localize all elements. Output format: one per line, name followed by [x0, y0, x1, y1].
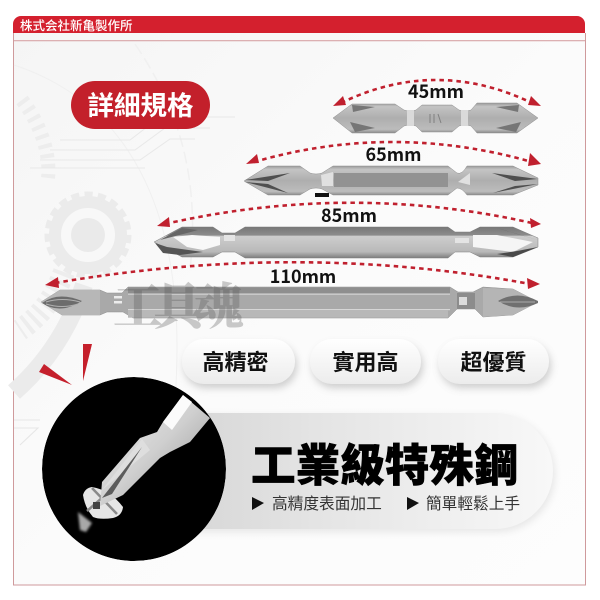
badge: specifications [71, 81, 210, 129]
header rule [14, 40, 585, 41]
measure arrow: 85mm [157, 202, 541, 228]
accent marks [39, 344, 92, 385]
badge: specifications: 詳細規格 [88, 84, 194, 123]
measure arrow: 65mm [246, 141, 541, 167]
length label: 65mm [366, 141, 421, 167]
watermark: 工具魂 [113, 267, 244, 339]
feature pill: superior quality: 超優質 [460, 345, 527, 377]
bullet: surface finish: 高精度表面加工 [272, 491, 382, 514]
banner: industrial steel [120, 413, 555, 532]
screw head [83, 487, 123, 519]
bit: 110mm [41, 287, 538, 318]
header bar [13, 15, 585, 34]
bit: 45mm [333, 103, 538, 133]
feature pill: high precision: 高精密 [202, 345, 269, 377]
label fragment behind 65mm bit [315, 193, 329, 197]
screw shank [78, 512, 92, 532]
bullet: easy to use: 簡單輕鬆上手 [426, 491, 520, 514]
length label: 110mm [270, 263, 336, 289]
feature pill: practical: 實用高 [332, 345, 399, 377]
bit: 65mm [244, 166, 538, 195]
feature pill: high precision [182, 339, 297, 388]
length label: 45mm [408, 78, 464, 104]
background gear and circuit pattern [14, 44, 235, 445]
bit: 85mm [154, 227, 538, 258]
feature pill: superior quality [438, 339, 551, 388]
photo: bit tip in screw head [42, 377, 226, 561]
company name: 株式会社新亀製作所 [20, 15, 133, 34]
measure arrow: 45mm [333, 78, 541, 106]
banner heading: 工業級特殊鋼 [251, 429, 519, 494]
measure arrow: 110mm [45, 262, 540, 289]
bit body [100, 395, 210, 506]
feature pill: practical [310, 339, 423, 388]
length label: 85mm [321, 202, 377, 228]
